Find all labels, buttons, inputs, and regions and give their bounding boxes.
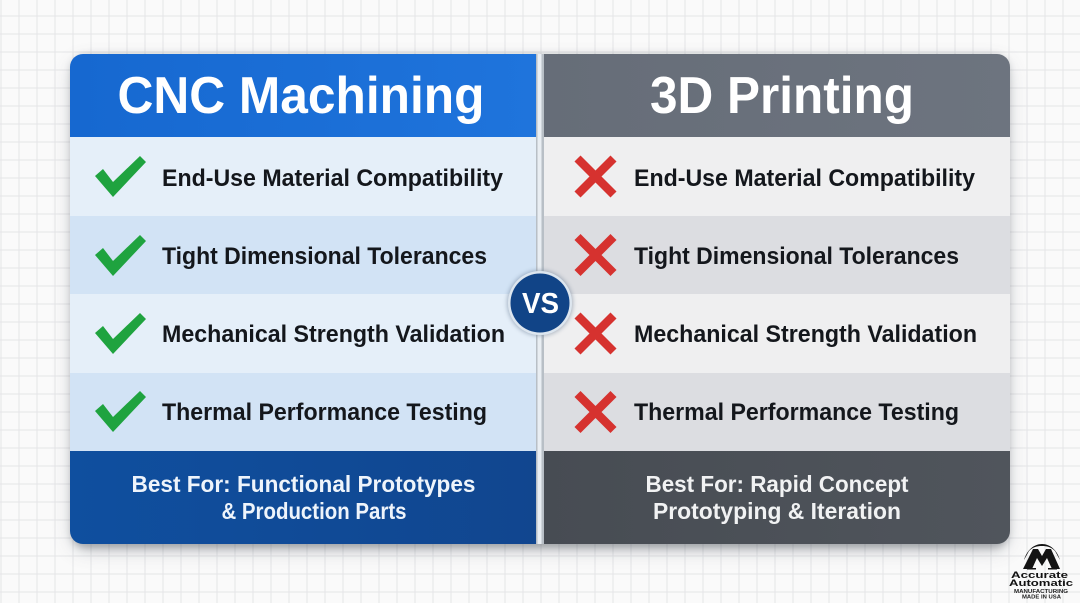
- 3D row 4: Thermal Performance Testing: [634, 399, 959, 426]
- CNC row 1: [70, 137, 537, 216]
- CNC row 1: End-Use Material Compatibility: [162, 165, 504, 192]
- 3D header: [543, 54, 1010, 137]
- 3D row 1: End-Use Material Compatibility: [634, 165, 976, 192]
- 3D row 2: [543, 216, 1010, 294]
- comparison card: [70, 54, 1010, 544]
- CNC row 4: Thermal Performance Testing: [162, 399, 487, 426]
- VS badge: [507, 270, 573, 336]
- panel: 3D Printing: [543, 54, 1010, 544]
- CNC header: [70, 54, 537, 137]
- 3D best for: [543, 451, 1010, 544]
- logo: Accurate Automatic: [1009, 544, 1073, 600]
- VS badge: VS: [522, 288, 559, 320]
- 3D row 2: Tight Dimensional Tolerances: [634, 243, 959, 270]
- 3D row 3: [543, 294, 1010, 373]
- 3D row 3: Mechanical Strength Validation: [634, 321, 977, 348]
- 3D best for: Prototyping & Iteration: [653, 498, 901, 524]
- CNC row 4: [70, 373, 537, 451]
- CNC best for: Best For: Functional Prototypes: [132, 471, 476, 497]
- card shadow: [72, 56, 1008, 550]
- logo mark: [1023, 544, 1060, 570]
- logo: Accurate Automatic: MANUFACTURING: [1014, 589, 1068, 595]
- 3D best for: Best For: Rapid Concept: [646, 471, 909, 497]
- 3D row 1: [543, 137, 1010, 216]
- panel: CNC Machining: [70, 54, 537, 544]
- logo: Accurate Automatic: Accurate: [1011, 570, 1068, 581]
- 3D row 4: [543, 373, 1010, 451]
- logo: Accurate Automatic: MADE IN USA: [1022, 594, 1061, 600]
- CNC row 2: Tight Dimensional Tolerances: [162, 243, 487, 270]
- CNC row 2: [70, 216, 537, 294]
- CNC row 3: [70, 294, 537, 373]
- CNC header: CNC Machining: [118, 67, 484, 125]
- CNC best for: [70, 451, 537, 544]
- logo: Accurate Automatic: Automatic: [1009, 578, 1073, 589]
- CNC best for: & Production Parts: [222, 498, 406, 524]
- 3D header: 3D Printing: [650, 67, 914, 125]
- CNC row 3: Mechanical Strength Validation: [162, 321, 505, 348]
